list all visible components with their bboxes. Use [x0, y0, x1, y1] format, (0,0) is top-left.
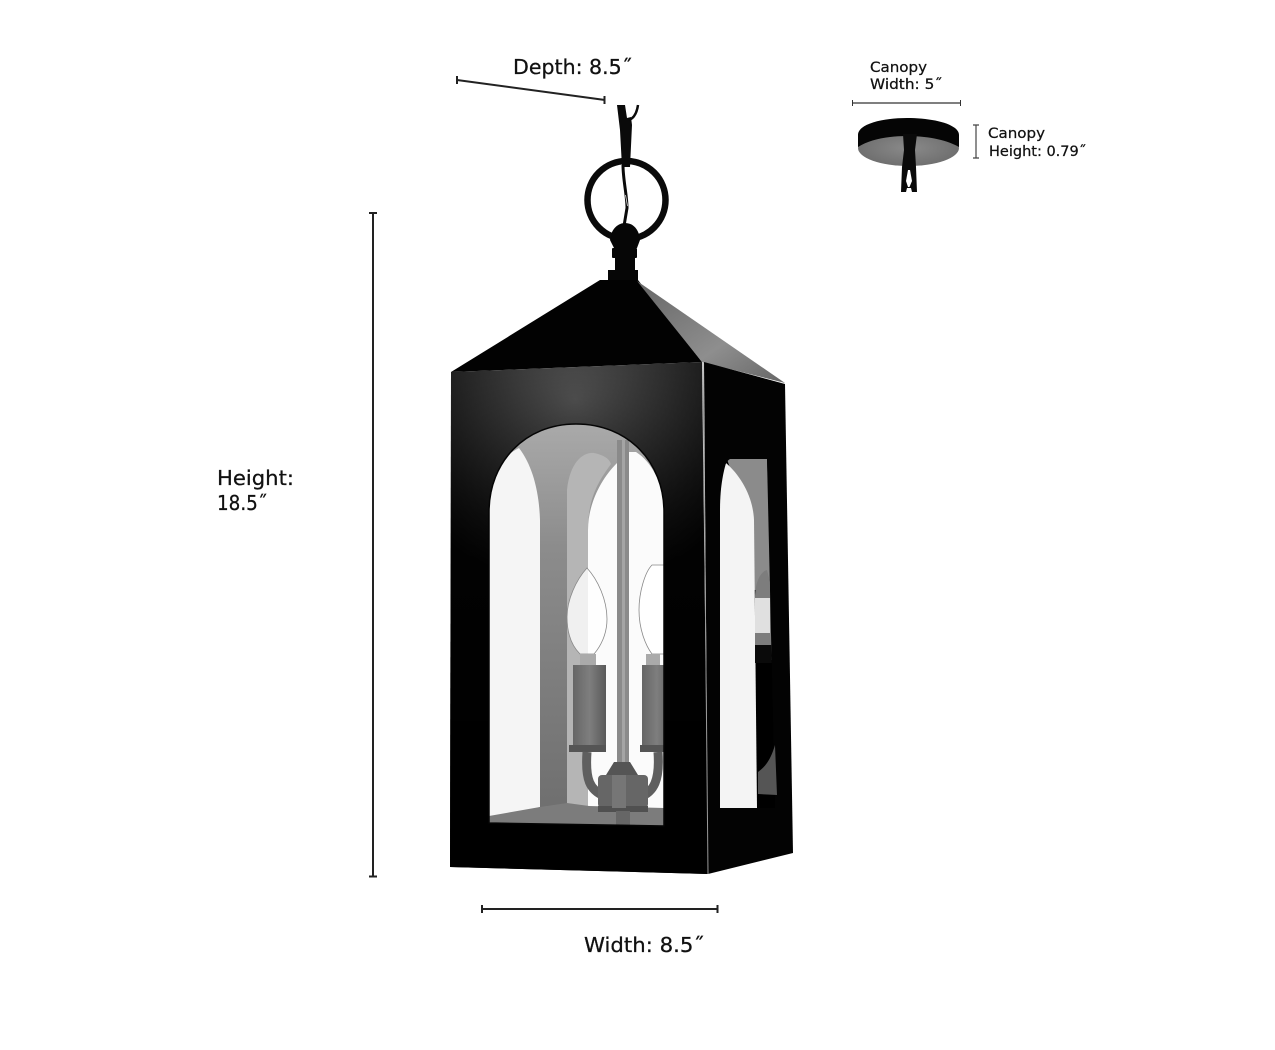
height label: 18.5˝: [217, 491, 267, 515]
arms and base: [587, 752, 658, 797]
lantern finial: [608, 223, 640, 281]
canopy width label: Width: 5˝: [870, 77, 942, 93]
height dimension line: [369, 212, 377, 877]
lantern front face: [450, 362, 708, 874]
canopy height line: [973, 125, 979, 158]
candle bulbs: [567, 565, 668, 665]
width dimension line: [482, 905, 718, 913]
depth dimension line: [457, 76, 605, 104]
lantern roof: [451, 280, 785, 383]
lantern side face: [704, 362, 793, 874]
canopy height label: Height: 0.79˝: [989, 144, 1086, 160]
canopy width label: Canopy: [870, 60, 927, 76]
canopy height label: [988, 126, 1086, 160]
canopy width label: [870, 60, 942, 93]
center stem: [617, 440, 629, 770]
hanging ring: [588, 161, 666, 239]
width label: Width: 8.5˝: [584, 933, 704, 957]
dimension diagram: [218, 58, 1086, 952]
height label: [217, 466, 294, 515]
candle sleeves: [569, 665, 672, 752]
canopy width line: [852, 100, 961, 106]
hanging chain and hook: [617, 105, 638, 226]
canopy height label: Canopy: [988, 126, 1045, 142]
front window: [485, 420, 672, 830]
side window: [720, 459, 772, 808]
canopy plate: [858, 118, 959, 192]
height label: Height:: [217, 466, 294, 490]
side window bracket: [758, 745, 777, 795]
window floor: [490, 803, 664, 825]
depth label: Depth: 8.5˝: [513, 55, 632, 79]
